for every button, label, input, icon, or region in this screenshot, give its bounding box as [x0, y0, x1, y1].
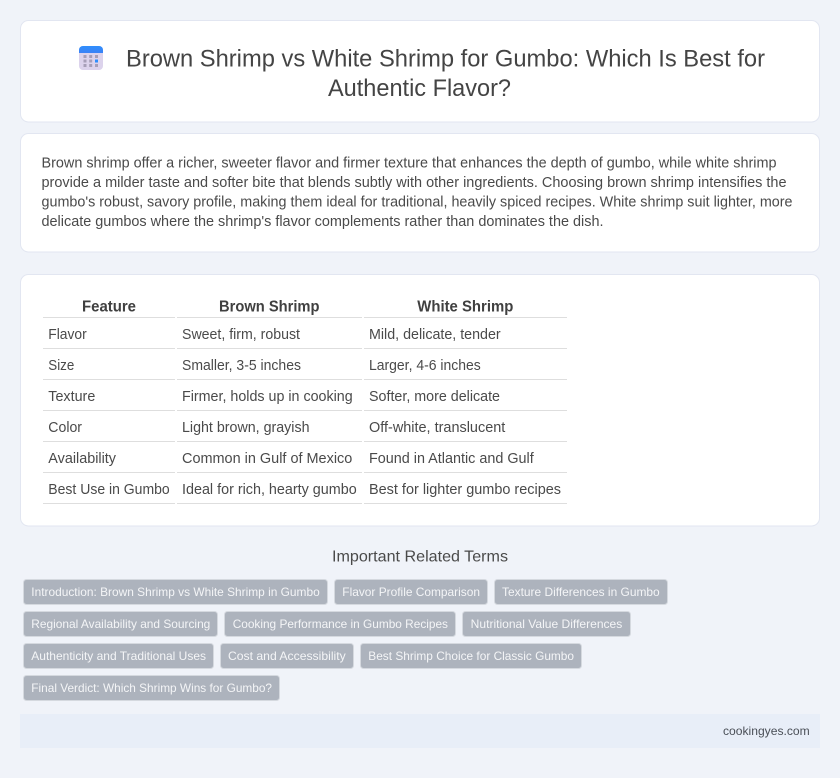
tag: nutritional value: [462, 612, 630, 636]
intro paragraph: [42, 156, 792, 230]
related term tags: [24, 580, 668, 700]
row: size: Larger, 4-6 inches: [369, 358, 481, 374]
row: best use in gumbo: Ideal for rich, hearty gumbo: [182, 482, 357, 498]
tag: introduction: Introduction: Brown Shrimp vs White Shrimp in Gumbo: [31, 585, 320, 599]
row: availability: Common in Gulf of Mexico: [182, 451, 352, 467]
tag: texture differences: [494, 580, 668, 604]
tag: best shrimp choice: Best Shrimp Choice for Classic Gumbo: [368, 649, 574, 663]
intro paragraph: provide a milder taste and softer bite that blends subtly with other ingredients. Choosing brown shrimp intensifies the: [42, 175, 786, 191]
footer source: cookingyes.com: [723, 724, 810, 738]
intro paragraph: gumbo's robust, savory profile, making them ideal for traditional, heavily spiced recipes. White shrimp suit lighter, more: [42, 195, 792, 211]
row: flavor: Mild, delicate, tender: [369, 327, 501, 343]
row: availability: Availability: [48, 451, 117, 467]
table header: [82, 299, 514, 316]
row: best use in gumbo: [48, 482, 561, 498]
title: [126, 46, 765, 102]
row: flavor: Sweet, firm, robust: [182, 327, 300, 343]
tag: cost: [220, 644, 354, 668]
tag: regional availability: [24, 612, 218, 636]
tag: authenticity: [24, 644, 214, 668]
row: color: Color: [48, 420, 82, 436]
title: Brown Shrimp vs White Shrimp for Gumbo: Which Is Best for: [126, 46, 765, 72]
row: availability: Found in Atlantic and Gulf: [369, 451, 535, 467]
table header: Feature: [82, 299, 136, 316]
tag: cooking performance: [224, 612, 456, 636]
header panel: [20, 20, 820, 122]
footer bar: [20, 714, 820, 748]
row: best use in gumbo: Best Use in Gumbo: [48, 482, 170, 498]
intro paragraph: Brown shrimp offer a richer, sweeter flavor and firmer texture that enhances the depth of gumbo, while white shrimp: [42, 156, 776, 172]
row: best use in gumbo: Best for lighter gumbo recipes: [369, 482, 561, 498]
heading: important related terms: Important Related Terms: [332, 549, 508, 566]
intro paragraph: delicate gumbos where the shrimp's flavor complements rather than dominates the dish.: [42, 214, 604, 230]
panel: comparison table: [20, 274, 820, 526]
table header: Brown Shrimp: [219, 299, 320, 316]
row: size: Size: [48, 358, 74, 374]
table header: White Shrimp: [417, 299, 514, 316]
row: color: Light brown, grayish: [182, 420, 310, 436]
row: texture: Softer, more delicate: [369, 389, 500, 405]
title: Authentic Flavor?: [328, 75, 511, 102]
row: texture: Firmer, holds up in cooking: [182, 389, 353, 405]
tag: flavor profile: [334, 580, 488, 604]
panel: introduction: [20, 134, 820, 252]
tag: nutritional value: Nutritional Value Differences: [471, 617, 622, 631]
row: flavor: Flavor: [48, 327, 87, 343]
tag: best shrimp choice: [360, 644, 582, 668]
tag: cooking performance: Cooking Performance in Gumbo Recipes: [233, 617, 448, 631]
tag: final verdict: Final Verdict: Which Shrimp Wins for Gumbo?: [31, 681, 272, 695]
row: texture: Texture: [48, 389, 95, 405]
tag: final verdict: [24, 676, 280, 700]
tag: regional availability: Regional Availability and Sourcing: [31, 617, 210, 631]
tag: flavor profile: Flavor Profile Comparison: [342, 585, 480, 599]
tag: cost: Cost and Accessibility: [228, 649, 346, 663]
tag: texture differences: Texture Differences in Gumbo: [502, 585, 660, 599]
row: color: Off-white, translucent: [369, 420, 505, 436]
tag: authenticity: Authenticity and Traditional Uses: [31, 649, 206, 663]
row: size: Smaller, 3-5 inches: [182, 358, 301, 374]
icon: calendar: [79, 46, 103, 70]
row: texture: [48, 389, 500, 405]
row: size: [48, 358, 481, 374]
row: availability: [48, 451, 535, 467]
row: color: [48, 420, 505, 436]
row: flavor: [48, 327, 501, 343]
tag: introduction: [24, 580, 328, 604]
table rules: [43, 317, 567, 504]
